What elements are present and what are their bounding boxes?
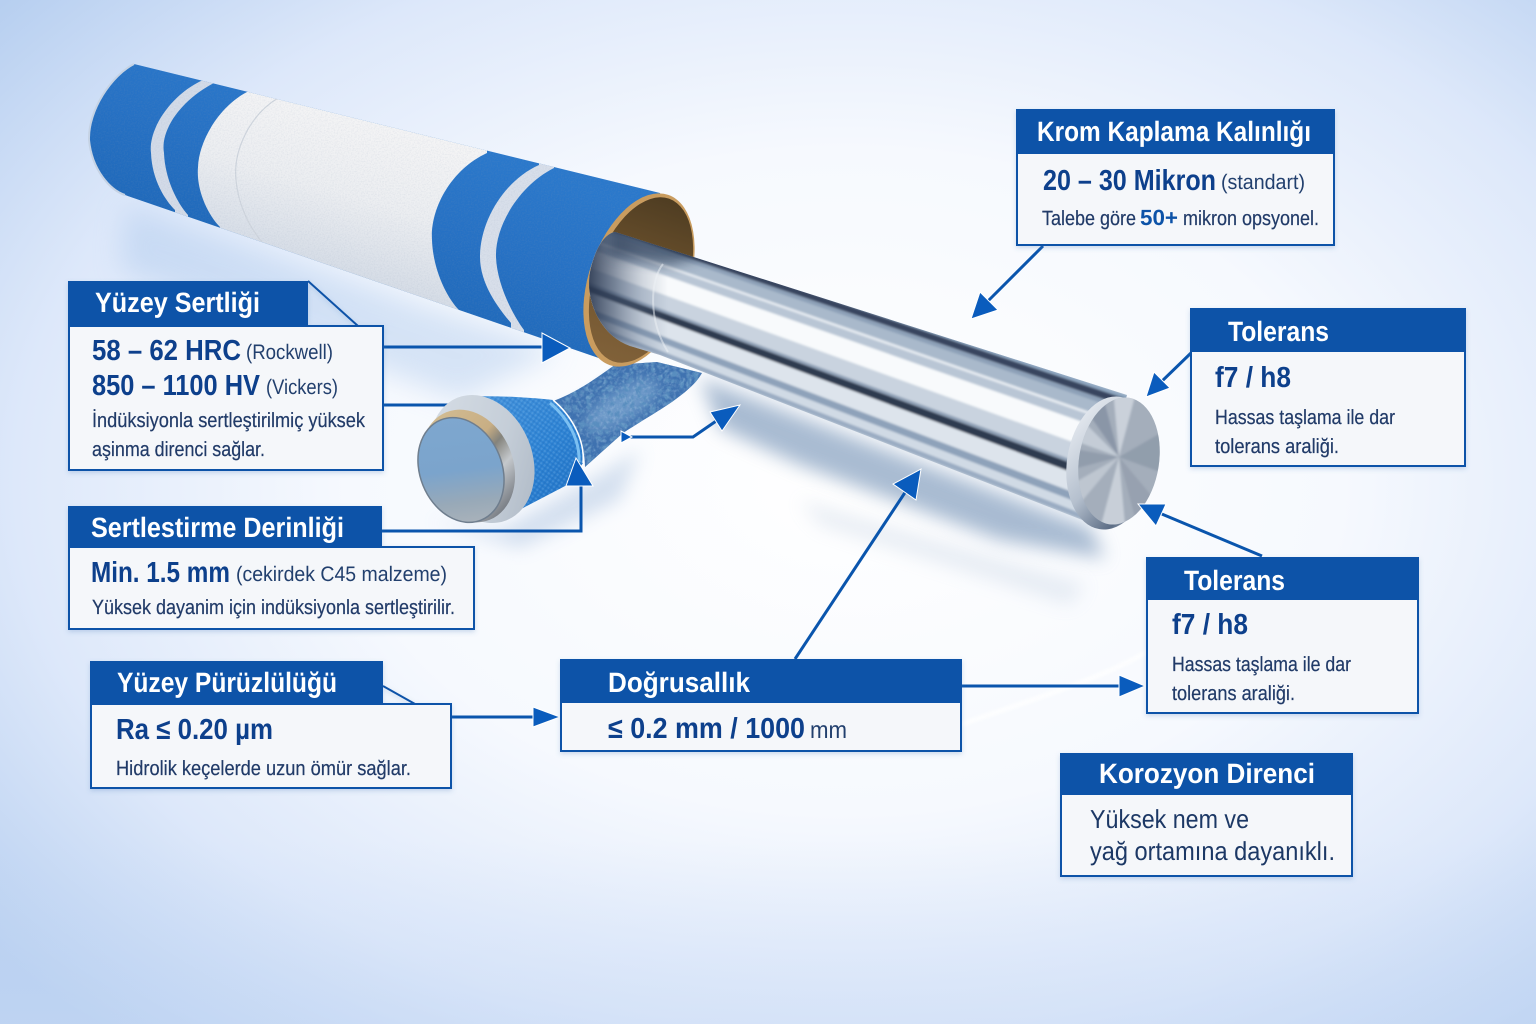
callout: Sertlestirme Derinliği: (cekirdek C45 malzeme) xyxy=(236,563,447,586)
callout: Krom Kaplama Kalınlığı: Krom Kaplama Kalınlığı xyxy=(1037,116,1311,147)
tube left band stripe xyxy=(150,80,213,217)
blue sleeve xyxy=(460,396,583,520)
callout: Korozyon Direnci: Yüksek nem ve xyxy=(1090,804,1249,834)
callout: Tolerans lower: tolerans araliği. xyxy=(1172,682,1295,705)
callout: Yüzey Sertliği: Yüzey Sertliği xyxy=(95,287,260,318)
arrow: tolerance lower xyxy=(1138,504,1262,556)
callout: Doğrusallık xyxy=(560,659,962,751)
callout: Tolerans lower: Hassas taşlama ile dar xyxy=(1172,653,1351,676)
callout: Yüzey Sertliği: 850 – 1100 HV xyxy=(92,370,261,402)
arrow: hardening depth xyxy=(382,458,593,531)
callout: Tolerans upper: Hassas taşlama ile dar xyxy=(1215,406,1395,429)
arrow: roughness to straightness xyxy=(451,707,560,727)
callout: Tolerans upper: Tolerans xyxy=(1228,316,1329,347)
silver collar xyxy=(411,379,553,539)
arrow: tolerance upper xyxy=(1146,353,1191,397)
crack texture xyxy=(556,362,702,467)
callout: Yüzey Pürüzlülüğü: Ra ≤ 0.20 µm xyxy=(116,714,273,746)
brass and steel ring xyxy=(405,395,531,537)
callout: Tolerans upper xyxy=(1190,308,1466,466)
arrow: coating detail xyxy=(621,405,740,443)
callout: Sertlestirme Derinliği: Min. 1.5 mm xyxy=(91,557,230,589)
sleeve weave xyxy=(460,396,583,520)
rod end face xyxy=(1069,392,1169,530)
sample end face xyxy=(403,405,519,535)
callout: Krom Kaplama Kalınlığı: 50+ xyxy=(1140,205,1178,230)
arrow: surface hardness to tube xyxy=(383,333,570,363)
callout: Krom Kaplama Kalınlığı: Talebe göre xyxy=(1042,207,1136,230)
tube right band stripe xyxy=(480,158,554,338)
callout: Yüzey Sertliği: İndüksiyonla sertleştirilmiç yüksek xyxy=(92,409,366,432)
tube surface grain xyxy=(90,66,653,356)
rod body xyxy=(589,232,1127,523)
leader line behind cut sample xyxy=(383,404,470,406)
rod highlights xyxy=(589,232,1127,520)
callout: Sertlestirme Derinliği: Sertlestirme Derinliği xyxy=(91,512,344,543)
tube bands xyxy=(90,66,653,356)
callout: Tolerans lower: f7 / h8 xyxy=(1172,609,1248,641)
crackled coating xyxy=(553,362,702,467)
tube end rim xyxy=(89,64,134,195)
callout: Tolerans upper: tolerans araliği. xyxy=(1215,435,1339,458)
callout: Yüzey Pürüzlülüğü: Hidrolik keçelerde uzun ömür sağlar. xyxy=(116,757,411,780)
tube opening interior xyxy=(569,184,713,376)
callout: Krom Kaplama Kalınlığı xyxy=(1016,109,1335,245)
callout: Yüzey Sertliği: (Vickers) xyxy=(266,376,338,399)
callout: Yüzey Sertliği: aşinma direnci sağlar. xyxy=(92,438,265,461)
callout: Yüzey Sertliği xyxy=(68,281,383,470)
callout: Korozyon Direnci: yağ ortamına dayanıklı. xyxy=(1090,836,1335,866)
callout: Doğrusallık: mm xyxy=(810,717,847,744)
callout: Krom Kaplama Kalınlığı: mikron opsyonel. xyxy=(1183,207,1319,230)
callout: Tolerans lower: Tolerans xyxy=(1184,565,1285,596)
callout: Korozyon Direnci: Korozyon Direnci xyxy=(1099,758,1315,789)
callout: Tolerans upper: f7 / h8 xyxy=(1215,362,1291,394)
arrow: straightness to tolerance xyxy=(962,675,1145,697)
rod end radial brushing xyxy=(1078,398,1160,524)
callout: Tolerans lower xyxy=(1146,557,1419,713)
arrow: chrome thickness xyxy=(971,246,1043,319)
coating upper edge xyxy=(553,365,613,400)
callout: Yüzey Sertliği: (Rockwell) xyxy=(246,341,333,364)
tube paper section xyxy=(198,84,487,318)
callout: Doğrusallık: ≤ 0.2 mm / 1000 xyxy=(608,713,805,745)
arrow: straightness to rod xyxy=(795,469,921,659)
callout: Krom Kaplama Kalınlığı: (standart) xyxy=(1221,171,1305,194)
sleeve cyan line xyxy=(550,403,579,462)
tube opening rim xyxy=(562,179,716,381)
cardboard tube xyxy=(85,60,716,381)
callout: Sertlestirme Derinliği: Yüksek dayanim için indüksiyonla sertleştirilir. xyxy=(92,596,455,619)
callout: Yüzey Sertliği: 58 – 62 HRC xyxy=(92,335,241,367)
callout: Yüzey Pürüzlülüğü xyxy=(90,661,451,788)
sleeve highlight line xyxy=(553,400,583,463)
callout: Doğrusallık: Doğrusallık xyxy=(608,667,750,698)
cast shadows and floor reflection xyxy=(120,205,1150,725)
cut sample section xyxy=(417,362,702,524)
callout: Sertlestirme Derinliği xyxy=(68,506,474,629)
tube blue body xyxy=(89,64,690,365)
rod end chamfer xyxy=(1057,390,1163,536)
paper seam xyxy=(236,98,278,242)
callout: Yüzey Pürüzlülüğü: Yüzey Pürüzlülüğü xyxy=(117,667,337,698)
callout: Korozyon Direnci xyxy=(1060,753,1353,876)
callout: Krom Kaplama Kalınlığı: 20 – 30 Mikron xyxy=(1043,165,1216,197)
chrome rod xyxy=(589,232,1160,530)
